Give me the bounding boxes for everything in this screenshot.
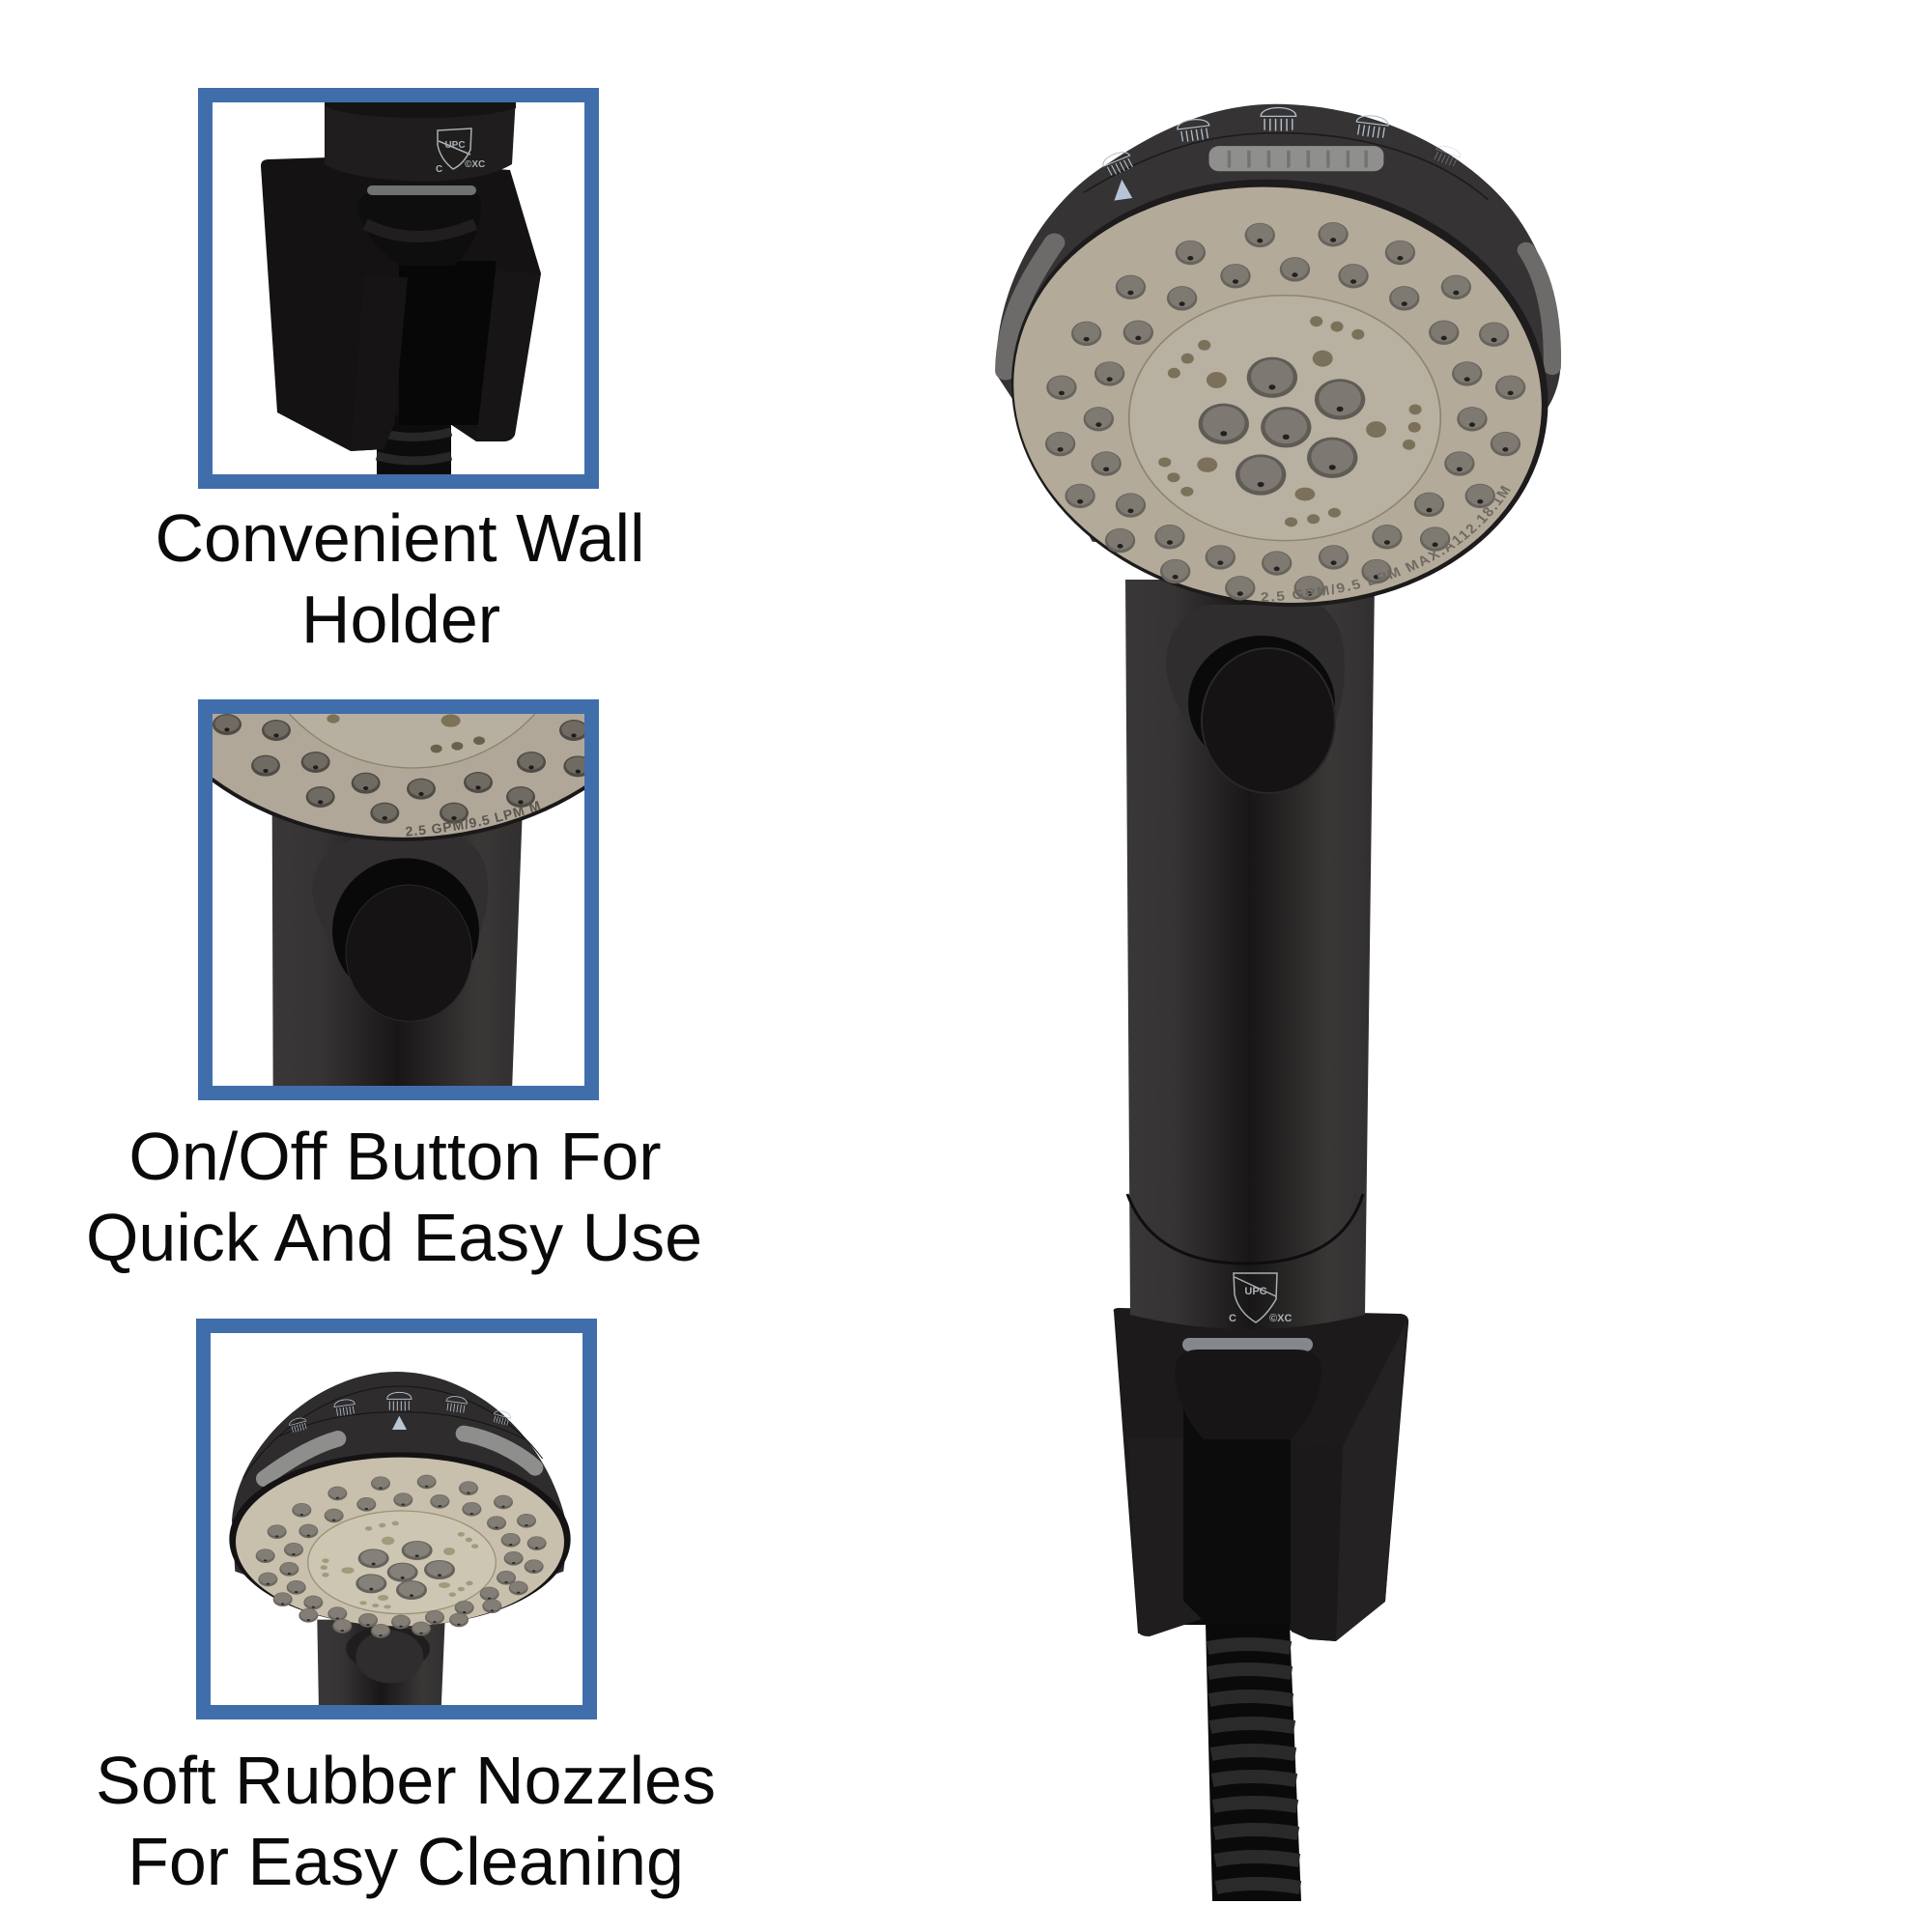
icon: UPC shield	[1229, 1273, 1292, 1324]
spray mode icons	[1100, 107, 1463, 177]
icon: UPC shield: C	[1229, 1313, 1236, 1324]
center nozzles	[1199, 357, 1365, 496]
photo: on/off button close-up	[213, 714, 584, 1086]
ribbed grip: right	[1526, 250, 1552, 367]
on/off button	[1166, 605, 1345, 793]
panel: on/off button detail	[86, 699, 702, 1275]
pointer triangle	[1114, 180, 1132, 201]
panel: soft rubber nozzles detail	[96, 1325, 716, 1899]
caption: soft rubber nozzles: For Easy Cleaning	[128, 1824, 684, 1899]
flow rate marking: 2.5 GPM/9.5 LPM MAX.A112.18.1M	[1262, 485, 1511, 602]
center spray holes	[1158, 316, 1422, 526]
icon: UPC shield	[436, 128, 485, 175]
label: flow rate marking: 2.5 GPM/9.5 LPM M	[406, 801, 541, 837]
icon: UPC shield: C	[436, 164, 442, 175]
knurled collar	[1175, 1350, 1321, 1439]
icon: UPC shield: ©XC	[1269, 1313, 1292, 1324]
bracket channel	[1183, 1401, 1291, 1625]
nozzle face	[966, 136, 1593, 650]
photo: angled shower head	[229, 1372, 571, 1710]
wall bracket back	[1114, 1308, 1408, 1640]
bracket left block	[1128, 1438, 1202, 1636]
main product: hand shower with holder and hose	[995, 104, 1561, 1901]
ribbed grip: top	[1209, 146, 1383, 171]
shower head	[995, 104, 1561, 607]
caption: wall holder: Convenient Wall	[155, 500, 645, 576]
frame: blue border	[205, 95, 591, 481]
caption: soft rubber nozzles: Soft Rubber Nozzles	[96, 1743, 716, 1818]
caption: wall holder: Holder	[301, 582, 500, 657]
icon: UPC shield: ©XC	[465, 159, 485, 170]
photo: wall holder close-up	[261, 97, 541, 483]
ribbed grip: left	[1006, 242, 1055, 371]
icon: UPC shield: UPC	[444, 140, 466, 151]
caption: on/off button: On/Off Button For	[128, 1119, 662, 1194]
panel: wall holder detail	[155, 95, 645, 657]
caption: on/off button: Quick And Easy Use	[86, 1200, 702, 1275]
metal hose	[1206, 1623, 1301, 1901]
outer nozzles	[1045, 222, 1525, 601]
frame: blue border	[203, 1325, 589, 1712]
head body	[996, 104, 1560, 560]
handle	[1125, 580, 1375, 1329]
bracket right block	[1291, 1322, 1406, 1641]
icon: UPC shield: UPC	[1244, 1286, 1267, 1297]
chrome ring	[1182, 1338, 1313, 1351]
frame: blue border	[205, 707, 591, 1094]
